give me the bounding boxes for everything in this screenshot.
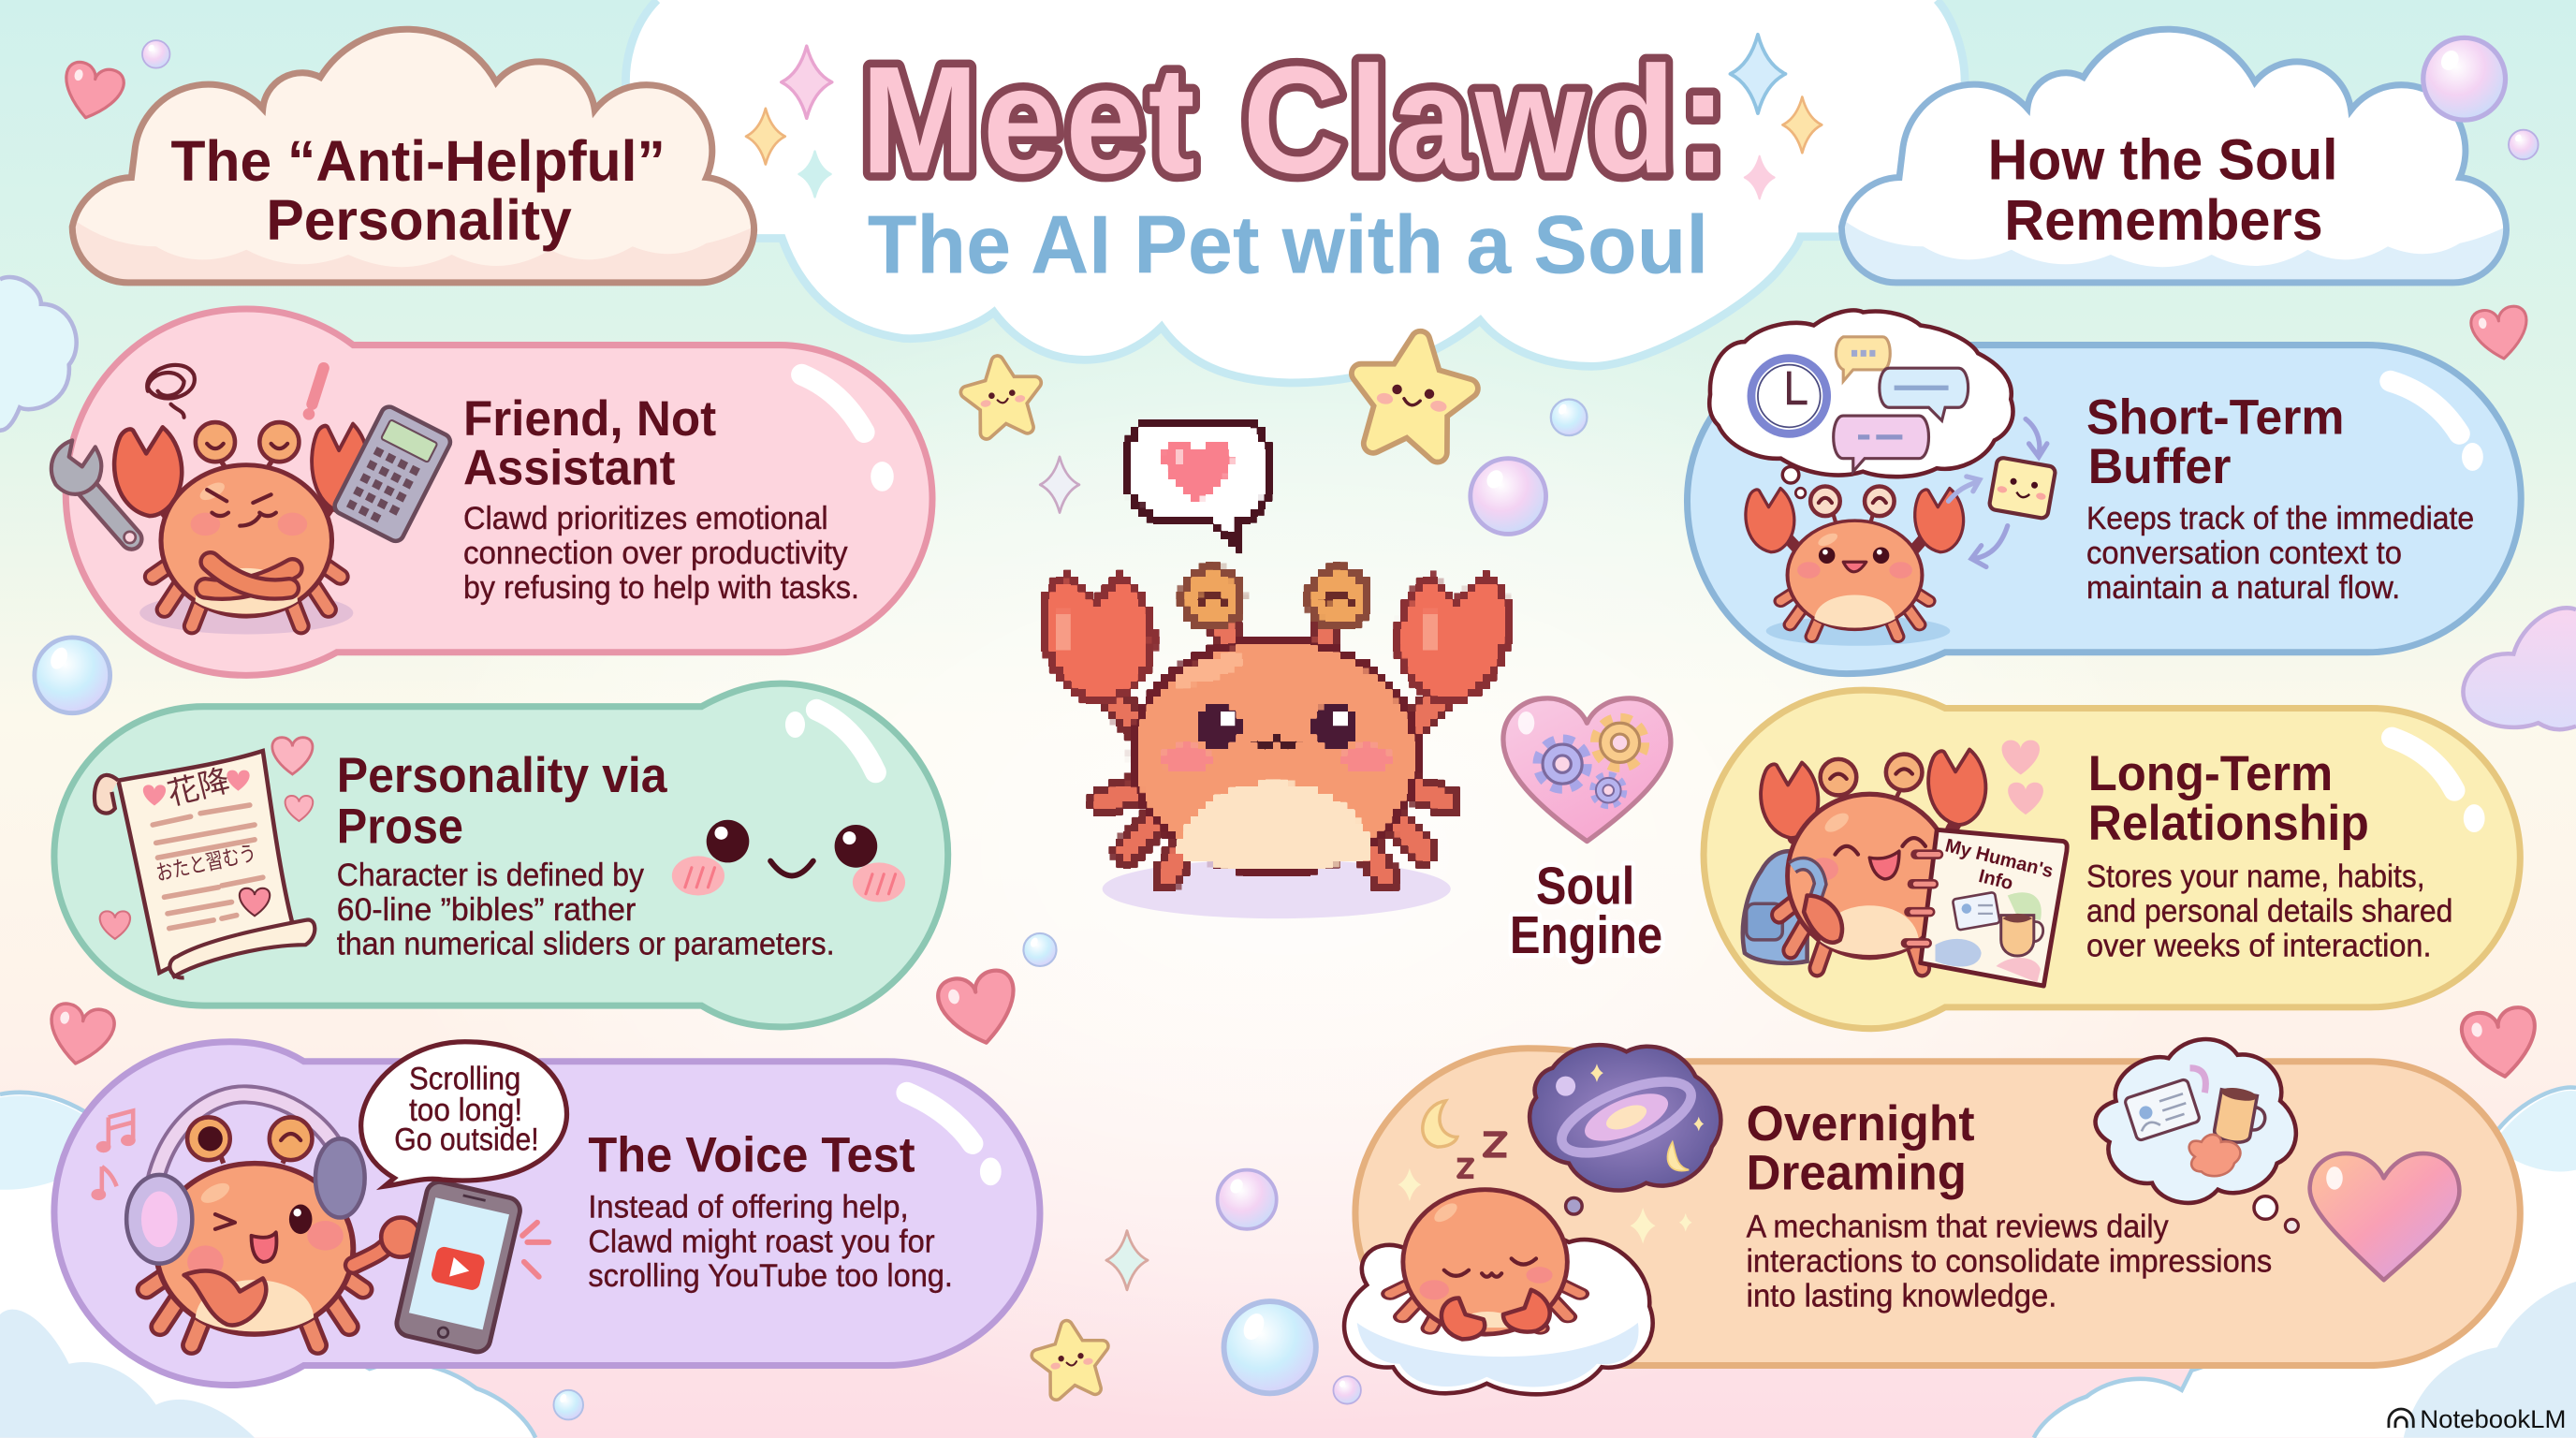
- icon: crab with backpack and notebook: [1743, 741, 2067, 986]
- notebook: [1906, 829, 2067, 986]
- text: and personal details shared: [2086, 894, 2452, 930]
- panel: friend, not assistant: [51, 309, 932, 675]
- icon: glossy heart: [2310, 1153, 2459, 1280]
- text: Short-Term: [2086, 389, 2345, 445]
- text: than numerical sliders or parameters.: [337, 927, 835, 962]
- speech bubble: Scrolling: [409, 1062, 520, 1097]
- background clouds: bottom right: [2034, 1087, 2576, 1438]
- soul engine label: Soul: [1536, 856, 1634, 915]
- text: Long-Term: [2088, 746, 2333, 801]
- background clouds: right edge: [2463, 608, 2576, 729]
- text: Clawd prioritizes emotional: [463, 501, 828, 536]
- soul engine label: [1510, 856, 1662, 964]
- background clouds: bottom left: [0, 1093, 535, 1438]
- hearts: [44, 59, 2541, 1081]
- text: [2086, 746, 2452, 963]
- icon: happy crab with memory card: [1746, 419, 2056, 646]
- subtitle: The AI Pet with a Soul: [868, 198, 1708, 290]
- notebooklm logo: NotebookLM: [2420, 1404, 2566, 1433]
- heading: How the Soul: [1988, 127, 2338, 192]
- header cloud: how the soul remembers: Remembers: [2004, 188, 2323, 253]
- background clouds: left edge: [0, 277, 77, 431]
- icon: moon and zzz: [1423, 1101, 1506, 1177]
- text: [588, 1127, 953, 1294]
- text: Character is defined by: [337, 858, 645, 893]
- text: Clawd might roast you for: [588, 1224, 935, 1259]
- main pixel crab with heart speech bubble: [1043, 420, 1508, 877]
- icon: memory thought cloud: [2096, 1039, 2298, 1232]
- header cloud: anti-helpful personality: [66, 29, 764, 296]
- text: Assistant: [463, 441, 675, 496]
- text: 60-line ”bibles” rather: [337, 892, 636, 928]
- text: into lasting knowledge.: [1747, 1278, 2056, 1313]
- speech bubble: too long!: [409, 1093, 522, 1128]
- panel: short-term buffer: [1687, 310, 2521, 674]
- heading: The “Anti-Helpful”: [171, 129, 666, 194]
- text: Prose: [337, 799, 463, 854]
- speech bubble: [361, 1042, 567, 1186]
- panel: long-term relationship: [1704, 690, 2520, 1029]
- text: Personality via: [337, 748, 667, 803]
- title cloud: [626, 0, 1965, 383]
- icon: cute face: [672, 820, 905, 902]
- pixel crab: [1043, 568, 1508, 877]
- soul engine label: Engine: [1510, 905, 1662, 964]
- icon: scroll: 花降: [165, 764, 233, 813]
- icon: galaxy dream cloud: [1530, 1045, 1720, 1214]
- text: Stores your name, habits,: [2086, 859, 2425, 895]
- text: Relationship: [2088, 796, 2369, 851]
- icon: scroll: おたと習むう: [154, 841, 258, 886]
- panel: personality via prose: [54, 683, 948, 1027]
- stars: [963, 333, 1474, 1396]
- text: Instead of offering help,: [588, 1190, 909, 1225]
- text: Friend, Not: [463, 391, 716, 447]
- text: maintain a natural flow.: [2086, 570, 2400, 606]
- header cloud: how the soul remembers: [1836, 29, 2516, 296]
- text: Keeps track of the immediate: [2086, 501, 2474, 536]
- icon: scroll: [95, 738, 315, 977]
- speech bubble: Go outside!: [394, 1123, 539, 1158]
- text: [337, 748, 835, 962]
- title: [861, 36, 1727, 290]
- icon: grumpy crab with wrench and calculator: [51, 365, 453, 634]
- text: scrolling YouTube too long.: [588, 1258, 953, 1294]
- text: [2086, 389, 2474, 606]
- center glow: [368, 279, 2208, 1430]
- text: [463, 391, 859, 606]
- icon: soul engine heart: [1503, 698, 1671, 842]
- text: over weeks of interaction.: [2086, 928, 2432, 963]
- text: Buffer: [2088, 439, 2231, 494]
- shadow under main crab: [1103, 859, 1451, 918]
- text: by refusing to help with tasks.: [463, 570, 859, 606]
- panel: overnight dreaming: [1344, 1039, 2520, 1394]
- text: connection over productivity: [463, 536, 848, 571]
- notebook: Info: [1977, 866, 2015, 894]
- title: Meet Clawd:: [861, 36, 1727, 206]
- text: Overnight: [1747, 1096, 1975, 1152]
- text: Dreaming: [1747, 1146, 1967, 1201]
- panel: the voice test: [54, 1042, 1040, 1386]
- notebook: My Human's: [1943, 835, 2056, 882]
- text: The Voice Test: [588, 1127, 915, 1182]
- icon: thought cloud with clock and chat bubbles: [1709, 310, 2012, 498]
- text: interactions to consolidate impressions: [1747, 1243, 2272, 1279]
- header cloud: anti-helpful personality: Personality: [266, 188, 572, 253]
- icon: crab with headphones and phone: [91, 1094, 549, 1355]
- text: A mechanism that reviews daily: [1747, 1210, 2170, 1245]
- sparkles around title: [746, 35, 1822, 1290]
- icon: sleeping crab on cloud: [1344, 1168, 1692, 1394]
- pixel speech bubble: [1125, 420, 1270, 542]
- text: [1747, 1096, 2272, 1313]
- text: conversation context to: [2086, 536, 2402, 571]
